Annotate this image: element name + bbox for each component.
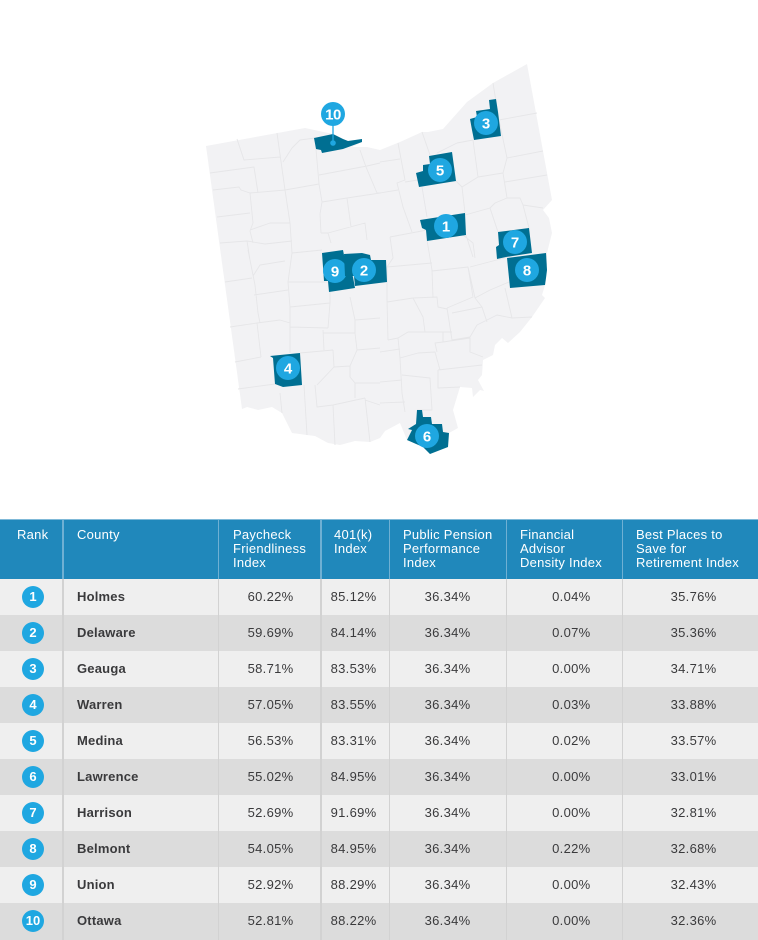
row 2: Delaware: 35.36% (671, 625, 716, 640)
row 1: Holmes: 36.34% (425, 589, 470, 604)
county 1: Holmes (420, 213, 466, 241)
header: paycheck friendliness: Friendliness (233, 541, 306, 556)
row 1: Holmes (0, 579, 758, 615)
row 7: Harrison: 0.00% (552, 805, 590, 820)
county 2: Delaware (344, 253, 387, 286)
row 9: Union: 9 (29, 877, 37, 892)
row 5: Medina: 5 (29, 733, 37, 748)
county 7: Harrison (496, 228, 532, 259)
county 9: Union: 9 (331, 264, 339, 280)
row 5: Medina: Medina (77, 733, 123, 748)
row 6: Lawrence: 0.00% (552, 769, 590, 784)
row 10: Ottawa: 32.36% (671, 913, 716, 928)
row 6: Lawrence: 33.01% (671, 769, 716, 784)
header: financial advisor: Financial (520, 527, 574, 542)
row 4: Warren (0, 687, 758, 723)
row 5: Medina: 36.34% (425, 733, 470, 748)
row 9: Union: 88.29% (331, 877, 376, 892)
row 8: Belmont: Belmont (77, 841, 130, 856)
row 8: Belmont: 8 (29, 841, 37, 856)
row 1: Holmes: Holmes (77, 589, 125, 604)
header: financial advisor (520, 527, 602, 570)
row 2: Delaware: 59.69% (248, 625, 294, 640)
header: public pension (403, 527, 492, 570)
row 5: Medina: 56.53% (248, 733, 294, 748)
header: best places: Retirement Index (636, 555, 739, 570)
header: public pension: Index (403, 555, 436, 570)
state outline (206, 64, 552, 454)
row 1: Holmes: 60.22% (248, 589, 294, 604)
header: paycheck friendliness: Index (233, 555, 266, 570)
row 10: Ottawa: Ottawa (77, 913, 122, 928)
header: best places: Save for (636, 541, 686, 556)
county 1: Holmes: 1 (442, 218, 450, 236)
row 8: Belmont: 36.34% (425, 841, 470, 856)
row 10: Ottawa: 52.81% (248, 913, 294, 928)
row 7: Harrison: 52.69% (248, 805, 294, 820)
county 8: Belmont (507, 253, 547, 288)
row 2: Delaware: 36.34% (425, 625, 470, 640)
row 9: Union: Union (77, 877, 115, 892)
row 7: Harrison: Harrison (77, 805, 132, 820)
row 1: Holmes: 1 (29, 589, 37, 604)
row 6: Lawrence: 84.95% (331, 769, 376, 784)
row 3: Geauga: 83.53% (331, 661, 376, 676)
row 10: Ottawa: 88.22% (331, 913, 376, 928)
row 10: Ottawa: 0.00% (552, 913, 590, 928)
header: financial advisor: Advisor (520, 541, 565, 556)
row 3: Geauga: 36.34% (425, 661, 470, 676)
header: best places (636, 527, 739, 570)
county 4: Warren (270, 353, 302, 387)
row 9: Union (0, 867, 758, 903)
row 2: Delaware: 84.14% (331, 625, 376, 640)
row 4: Warren: 36.34% (425, 697, 470, 712)
row 7: Harrison: 91.69% (331, 805, 376, 820)
row 5: Medina (0, 723, 758, 759)
header: financial advisor: Density Index (520, 555, 602, 570)
table header (0, 519, 758, 579)
header: 401(k): Index (334, 541, 367, 556)
ranking table (0, 519, 758, 940)
county 2: Delaware: 2 (360, 262, 368, 280)
county 4: Warren: 4 (284, 360, 293, 378)
row 3: Geauga: Geauga (77, 661, 126, 676)
row 6: Lawrence: 36.34% (425, 769, 470, 784)
map of Ohio counties (206, 64, 552, 454)
row 9: Union: 32.43% (671, 877, 716, 892)
county borders (210, 83, 547, 445)
row 2: Delaware: Delaware (77, 625, 136, 640)
row 10: Ottawa: 36.34% (425, 913, 470, 928)
county 9: Union (322, 250, 355, 292)
row 7: Harrison: 36.34% (425, 805, 470, 820)
row 8: Belmont: 54.05% (248, 841, 294, 856)
row 4: Warren: Warren (77, 697, 123, 712)
row 7: Harrison: 7 (29, 805, 37, 820)
row 3: Geauga: 34.71% (671, 661, 716, 676)
row 5: Medina: 0.02% (552, 733, 590, 748)
header: county: County (77, 527, 120, 542)
row 3: Geauga: 0.00% (552, 661, 590, 676)
row 2: Delaware: 2 (29, 625, 37, 640)
county 3: Geauga (470, 99, 501, 140)
county 8: Belmont: 8 (523, 262, 531, 280)
county 10: Ottawa with pin (314, 102, 362, 153)
row 3: Geauga (0, 651, 758, 687)
row 4: Warren: 57.05% (248, 697, 294, 712)
row 10: Ottawa (0, 903, 758, 940)
row 6: Lawrence: 6 (29, 769, 37, 784)
row 4: Warren: 83.55% (331, 697, 376, 712)
header: rank: Rank (17, 527, 48, 542)
header: public pension: Public Pension (403, 527, 492, 542)
row 6: Lawrence: 55.02% (248, 769, 294, 784)
row 4: Warren: 33.88% (671, 697, 716, 712)
row 8: Belmont: 0.22% (552, 841, 590, 856)
row 7: Harrison: 32.81% (671, 805, 716, 820)
county 6: Lawrence: 6 (423, 428, 431, 446)
header: paycheck friendliness (233, 527, 306, 570)
header: best places: Best Places to (636, 527, 723, 542)
county 6: Lawrence (407, 410, 449, 454)
header: paycheck friendliness: Paycheck (233, 527, 291, 542)
row 8: Belmont: 84.95% (331, 841, 376, 856)
header: 401(k) (334, 527, 372, 556)
county 3: Geauga: 3 (482, 116, 490, 132)
row 7: Harrison (0, 795, 758, 831)
row 3: Geauga: 58.71% (248, 661, 294, 676)
row 8: Belmont: 32.68% (671, 841, 716, 856)
county 10: Ottawa with pin: 10 (325, 106, 341, 124)
row 10: Ottawa: 10 (26, 913, 40, 928)
header: public pension: Performance (403, 541, 480, 556)
row 2: Delaware: 0.07% (552, 625, 590, 640)
county 5: Medina: 5 (436, 162, 444, 180)
row 4: Warren: 0.03% (552, 697, 590, 712)
row 5: Medina: 83.31% (331, 733, 376, 748)
county 7: Harrison: 7 (511, 234, 519, 252)
row 3: Geauga: 3 (29, 661, 37, 676)
row 5: Medina: 33.57% (671, 733, 716, 748)
county 5: Medina (416, 152, 456, 187)
row 1: Holmes: 85.12% (331, 589, 376, 604)
row 9: Union: 36.34% (425, 877, 470, 892)
row 9: Union: 52.92% (248, 877, 294, 892)
row 9: Union: 0.00% (552, 877, 590, 892)
row 2: Delaware (0, 615, 758, 651)
row 6: Lawrence: Lawrence (77, 769, 139, 784)
row 4: Warren: 4 (29, 697, 37, 712)
row 1: Holmes: 0.04% (552, 589, 590, 604)
header: 401(k): 401(k) (334, 527, 372, 542)
row 6: Lawrence (0, 759, 758, 795)
row 1: Holmes: 35.76% (671, 589, 716, 604)
row 8: Belmont (0, 831, 758, 867)
